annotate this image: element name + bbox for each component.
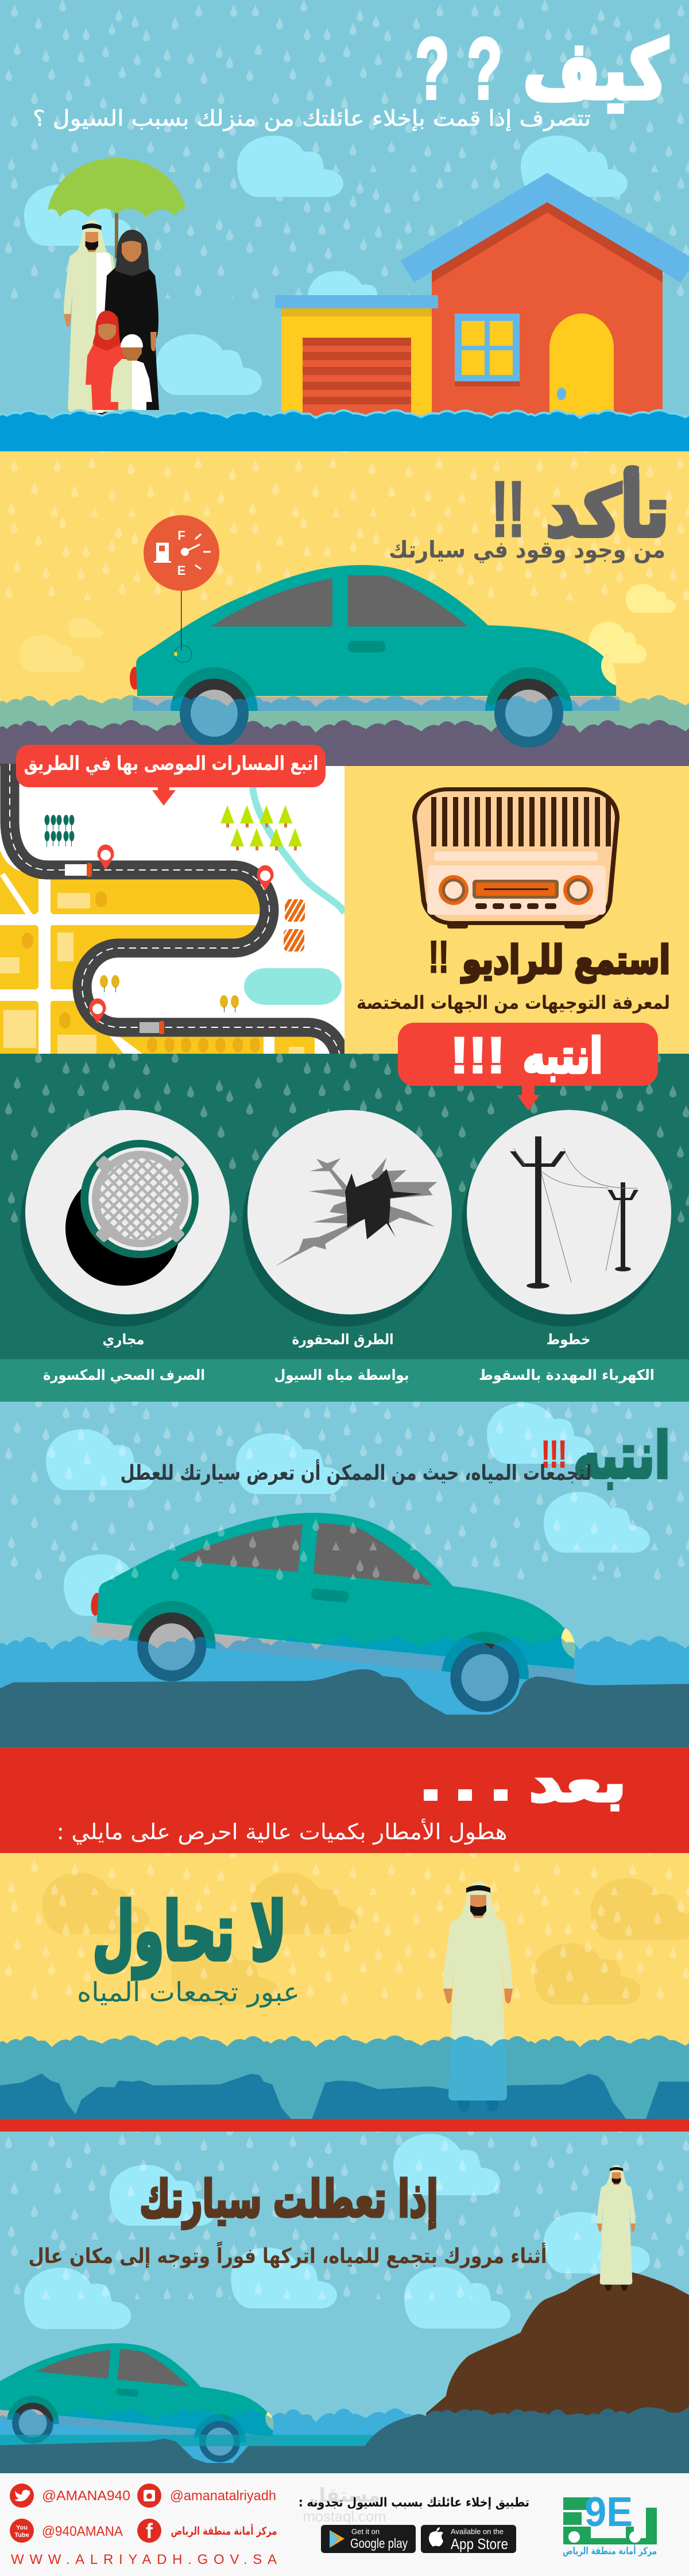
water overlay: [0, 2408, 689, 2473]
subtitle: تتصرف إذا قمت بإخلاء عائلتك من منزلك بسبب السيول ؟: [33, 106, 591, 131]
heading: make sure: !!: [491, 466, 525, 552]
water overlay: [0, 695, 689, 766]
badge: app store: Available on the: [451, 2527, 504, 2536]
callout: follow routes: [16, 745, 326, 806]
icon: radio: [412, 787, 620, 929]
caption band: [0, 1359, 689, 1402]
card: potholes: [242, 1110, 452, 1326]
heading: do not try: لا تحاول: [93, 1886, 286, 1979]
social: youtube: You: [16, 2524, 28, 2531]
watermark: [303, 2484, 386, 2525]
heading: watch out: [541, 1419, 670, 1492]
water overlay: [0, 1636, 689, 1748]
callout: warning: !!!: [450, 1027, 505, 1084]
heading: after: بعد: [529, 1753, 626, 1813]
yellow trees: [100, 975, 239, 1012]
section: do not cross: [0, 1853, 689, 2119]
callout: follow routes: اتبع المسارات الموصى بها في الطريق: [24, 752, 318, 775]
garage: [275, 295, 438, 416]
labels: row two: بواسطة مياه السيول: [274, 1367, 409, 1384]
water overlay: [0, 2036, 689, 2119]
footer: [0, 2473, 689, 2576]
labels: row two: الكهرباء المهددة بالسقوط: [479, 1367, 655, 1384]
house body: [432, 202, 663, 416]
social: facebook: [137, 2519, 277, 2543]
fuel gauge callout: [144, 515, 219, 663]
labels: row one: الطرق المحفورة: [292, 1331, 394, 1348]
fuel gauge callout: E: [177, 563, 185, 578]
family: father: [64, 220, 119, 421]
house roof: [401, 173, 689, 283]
app text: تطبيق إخلاء عائلتك بسبب السيول تجدونه :: [299, 2496, 529, 2510]
river and pond: [244, 787, 344, 1005]
dark trees: [45, 815, 75, 846]
divider band: [0, 2119, 689, 2132]
heading: after: [424, 1753, 626, 1813]
subheading: لتجمعات المياه، حيث من الممكن أن تعرض سيارتك للعطل: [121, 1459, 591, 1485]
social: facebook: f: [146, 2519, 153, 2543]
callout: warning: [398, 1023, 658, 1111]
man standing in water: [443, 1881, 513, 2111]
flood water: [0, 409, 689, 451]
social: instagram: @amanatalriyadh: [170, 2488, 276, 2504]
road: [10, 764, 340, 1059]
house door: [549, 314, 614, 416]
badge: app store: [421, 2525, 516, 2553]
logo: 9E: [585, 2489, 633, 2535]
social: twitter: [10, 2484, 130, 2508]
subheading: أثناء مرورك بتجمع للمياه، اتركها فوراً وتوجه إلى مكان عال: [29, 2241, 547, 2268]
clouds: [24, 2134, 650, 2329]
callout: warning: انتبه: [522, 1028, 603, 1084]
watermark: mostaql.com: [303, 2508, 386, 2525]
pale clouds: [20, 584, 676, 672]
ground and mound: [0, 2406, 689, 2473]
title: how: ?: [467, 20, 502, 117]
map yellow blocks: [0, 850, 315, 1054]
section: check fuel: [0, 451, 689, 766]
logo: مركز أمانة منطقة الرياض: [563, 2544, 657, 2557]
map pins: [90, 845, 274, 1024]
title: how: ?: [416, 20, 449, 117]
subheading: من وجود وقود في سيارتك: [389, 537, 665, 563]
card: sewers: [20, 1110, 230, 1326]
section: map panel: [0, 745, 344, 1059]
card: power lines: [462, 1110, 671, 1326]
subheading: هطول الأمطار بكميات عالية احرص على مايلي :: [56, 1818, 508, 1845]
labels: row one: [102, 1331, 590, 1348]
labels: row two: الصرف الصحي المكسورة: [43, 1367, 205, 1384]
family: daughter: [86, 311, 125, 410]
subheading: عبور تجمعات المياه: [77, 1977, 300, 2008]
title: how: [416, 20, 668, 118]
lime trees: [220, 805, 302, 850]
section: after rain banner: [0, 1748, 689, 1853]
social: youtube: [10, 2519, 123, 2543]
hill: [426, 2271, 689, 2420]
clouds: [24, 136, 628, 395]
fuel gauge callout: F: [177, 528, 185, 543]
section: water warning: [0, 1402, 689, 1748]
submerged ground: [0, 2074, 689, 2119]
logo: [563, 2489, 657, 2557]
labels: row one: مجاري: [102, 1331, 145, 1348]
house window: [455, 314, 520, 386]
section: radio panel: [344, 766, 689, 1054]
umbrella: [48, 158, 186, 258]
clouds: [42, 1873, 689, 2005]
man on hill: [597, 2165, 636, 2291]
section: hazards: [0, 1023, 689, 1402]
social: instagram: [137, 2484, 276, 2508]
social: twitter: @AMANA940: [42, 2488, 130, 2504]
ground under water: [0, 720, 689, 766]
badge: google play: Google play: [350, 2536, 408, 2551]
badge: google play: [321, 2525, 416, 2553]
car tilted: [84, 1491, 590, 1721]
section: car stalled: [0, 2132, 689, 2473]
labels: row two: [43, 1367, 655, 1384]
family: son: [111, 334, 152, 410]
heading: if car breaks: إذا تعطلت سيارتك: [140, 2169, 438, 2229]
heading: make sure: تأكد: [546, 467, 669, 552]
hatched fields: [284, 899, 305, 952]
heading: watch out: !!!: [541, 1433, 567, 1475]
website: WWW.ALRIYADH.GOV.SA: [11, 2552, 277, 2567]
labels: row one: خطوط: [547, 1331, 590, 1348]
social: facebook: مركز أمانة منطقة الرياض: [171, 2524, 277, 2538]
heading: make sure: [491, 466, 669, 552]
car: [130, 565, 620, 748]
social: youtube: Tube: [14, 2532, 29, 2539]
badge: app store: App Store: [451, 2535, 508, 2552]
heading: listen to radio: !!: [428, 931, 449, 982]
family: mother: [104, 230, 159, 410]
car stalled in water: [0, 2330, 282, 2467]
trucks: [65, 863, 164, 1034]
clouds: [46, 1403, 650, 1616]
ground with pothole: [0, 1669, 689, 1748]
social: youtube: @940AMANA: [42, 2524, 123, 2539]
watermark: مستقل: [309, 2484, 380, 2507]
badge: google play: Get it on: [351, 2527, 380, 2536]
section: intro flood scene: [0, 0, 689, 451]
